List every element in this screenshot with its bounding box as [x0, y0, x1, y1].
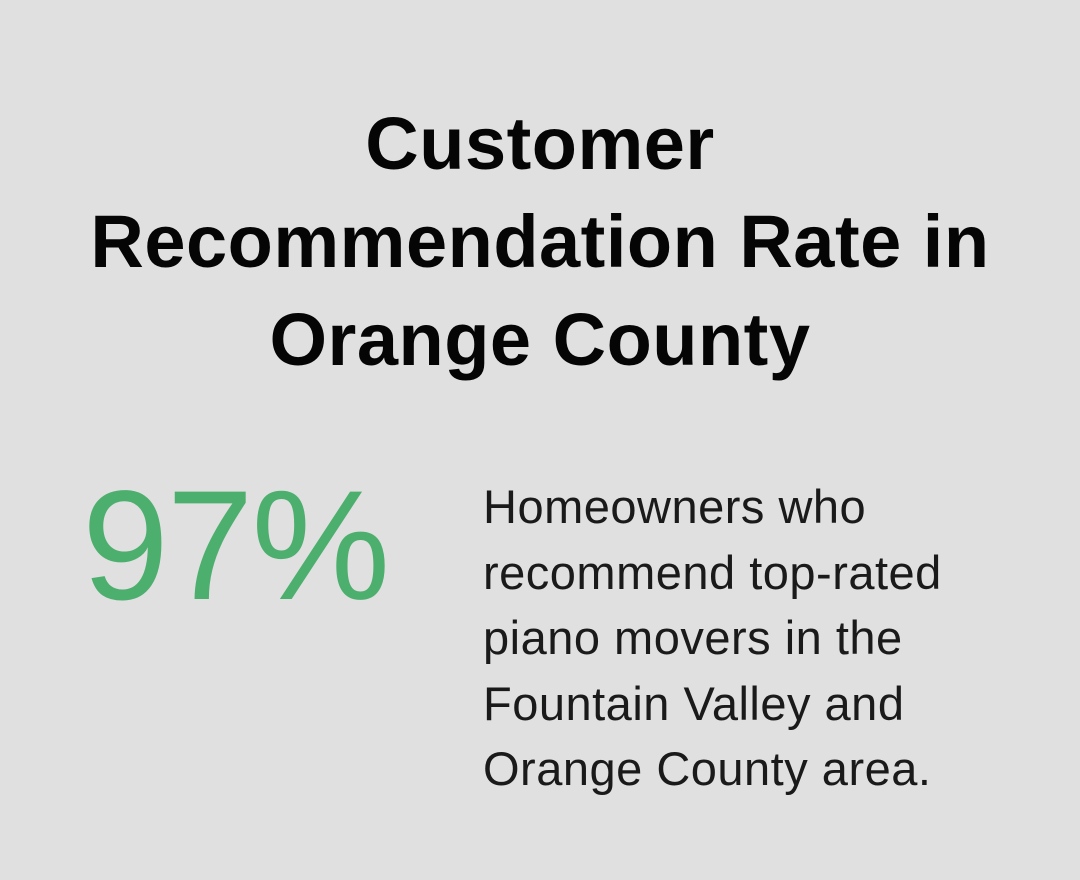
- description text: [483, 480, 942, 795]
- description text: piano movers in the: [483, 611, 903, 664]
- title: Customer: [365, 102, 715, 185]
- description text: Fountain Valley and: [483, 676, 904, 730]
- title: Orange County: [270, 298, 810, 381]
- description text: Orange County area.: [483, 742, 931, 795]
- description text: recommend top-rated: [483, 546, 942, 598]
- title: Recommendation Rate in: [90, 200, 990, 283]
- description text: Homeowners who: [483, 480, 866, 533]
- stat: 97%: 97%: [82, 459, 388, 633]
- title: [90, 102, 990, 381]
